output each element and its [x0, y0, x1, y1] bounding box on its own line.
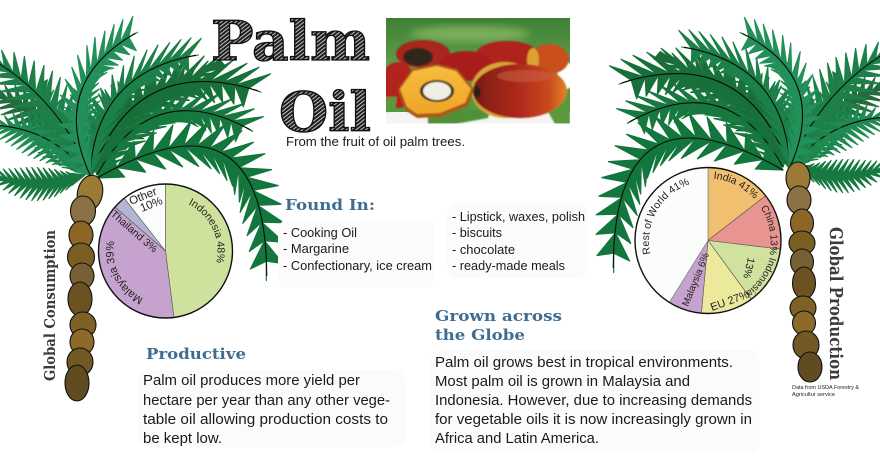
- left palm tree fronds: [0, 3, 330, 284]
- panel: found in: - Margarine: [283, 241, 349, 256]
- subtitle: From the fruit of oil palm trees.: [286, 134, 465, 149]
- photo: palm fruit: [380, 18, 575, 124]
- panel: grown across the globe: Indonesia. However, due to increasing demands: [435, 392, 752, 409]
- side label: Global Consumption: Global Consumption: [41, 230, 59, 381]
- panel: productive: table oil allowing production costs to: [143, 411, 388, 428]
- panel: found in: - Confectionary, ice cream: [283, 258, 432, 273]
- panel: productive: [138, 345, 405, 447]
- data source note: Agricultur service: [792, 392, 835, 398]
- panel: found in: - biscuits: [452, 225, 502, 240]
- panel: found in: - ready-made meals: [452, 258, 565, 273]
- left palm tree trunk: [65, 173, 106, 401]
- left pie chart: global consumption: Other: [128, 186, 159, 208]
- panel: found in: [278, 196, 588, 288]
- data source note: [792, 385, 859, 398]
- panel: grown across the globe: Palm oil grows best in tropical environments.: [435, 354, 733, 371]
- panel: grown across the globe: Most palm oil is grown in Malaysia and: [435, 373, 690, 390]
- panel: found in: - Cooking Oil: [283, 225, 357, 240]
- title: Palm Oil: Oil: [279, 80, 371, 144]
- panel: found in: - chocolate: [452, 242, 515, 257]
- data source note: Data from USDA Forestry &: [792, 385, 859, 391]
- left pie chart: global consumption: Thailand 3%: [108, 208, 160, 255]
- right pie chart: global production: India 41%: [714, 172, 758, 198]
- left pie chart: global consumption: 10%: [139, 195, 164, 215]
- panel: grown across the globe: the Globe: [435, 326, 525, 344]
- panel: found in: Found In:: [285, 196, 375, 214]
- right pie chart: global production: [634, 166, 782, 314]
- panel: grown across the globe: Africa and Latin America.: [435, 430, 599, 447]
- side label: Global Production: Global Production: [825, 227, 846, 380]
- right pie chart: global production: Rest of World 41%: [642, 178, 689, 254]
- left pie chart: global consumption: Malaysia 39%: [106, 241, 143, 304]
- panel: found in: - Lipstick, waxes, polish: [452, 209, 585, 224]
- panel: grown across the globe: [430, 307, 760, 452]
- left pie chart: global consumption: [98, 183, 234, 319]
- right palm tree fronds: [550, 2, 880, 276]
- panel: grown across the globe: Grown across: [435, 307, 562, 325]
- right pie chart: global production: China 13%: [762, 206, 778, 255]
- right pie chart: global production: 13%: [740, 256, 757, 280]
- right pie chart: global production: Malaysia 6%: [681, 251, 712, 308]
- title: Palm Oil: [211, 9, 371, 144]
- panel: productive: hectare per year than any other vege-: [143, 392, 390, 409]
- panel: grown across the globe: for vegetable oils it is now increasingly grown in: [435, 411, 752, 428]
- left pie chart: global consumption: Indonesia 48%: [189, 198, 225, 263]
- right pie chart: global production: Indonesia: [746, 258, 776, 296]
- panel: productive: Palm oil produces more yield per: [143, 372, 360, 389]
- panel: productive: be kept low.: [143, 430, 222, 447]
- title: Palm Oil: Palm: [211, 9, 370, 73]
- right palm tree trunk: [786, 162, 822, 382]
- panel: productive: Productive: [146, 345, 246, 363]
- right pie chart: global production: EU 27%: [709, 289, 751, 314]
